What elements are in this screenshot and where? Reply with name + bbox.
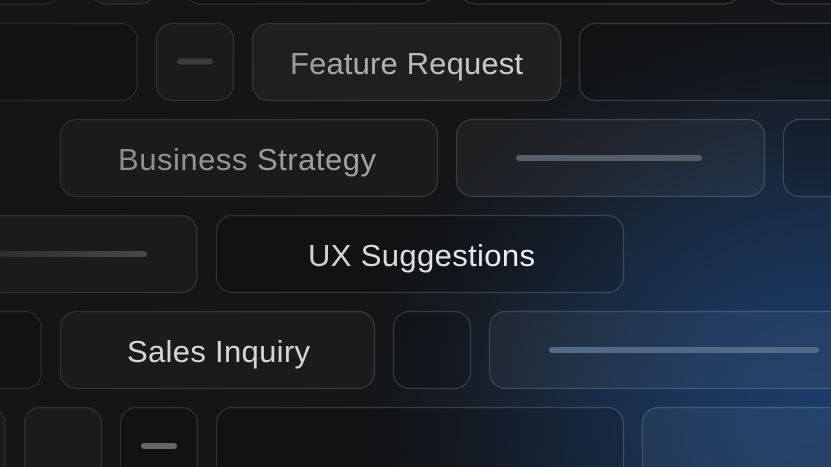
tag: Business Strategy: Business Strategy xyxy=(118,142,376,177)
row 6: keys xyxy=(0,408,831,467)
row 5: keys xyxy=(0,312,831,388)
tag: Sales Inquiry xyxy=(60,312,374,388)
tag: UX Suggestions xyxy=(216,216,624,292)
dash key xyxy=(156,24,234,100)
bar key xyxy=(490,312,831,388)
dash key xyxy=(120,408,198,467)
tag: Business Strategy xyxy=(60,120,438,196)
bar key xyxy=(456,120,764,196)
row 2: keys xyxy=(0,24,831,100)
tag: Feature Request xyxy=(252,24,560,100)
tag: UX Suggestions: UX Suggestions xyxy=(308,238,535,273)
tag: Sales Inquiry: Sales Inquiry xyxy=(127,334,310,369)
row 3: keys xyxy=(60,120,831,196)
row 1: clipped keys at top xyxy=(0,0,831,4)
tag: Feature Request: Feature Request xyxy=(290,46,523,81)
row 4: keys xyxy=(0,216,624,292)
bar key xyxy=(0,216,197,292)
